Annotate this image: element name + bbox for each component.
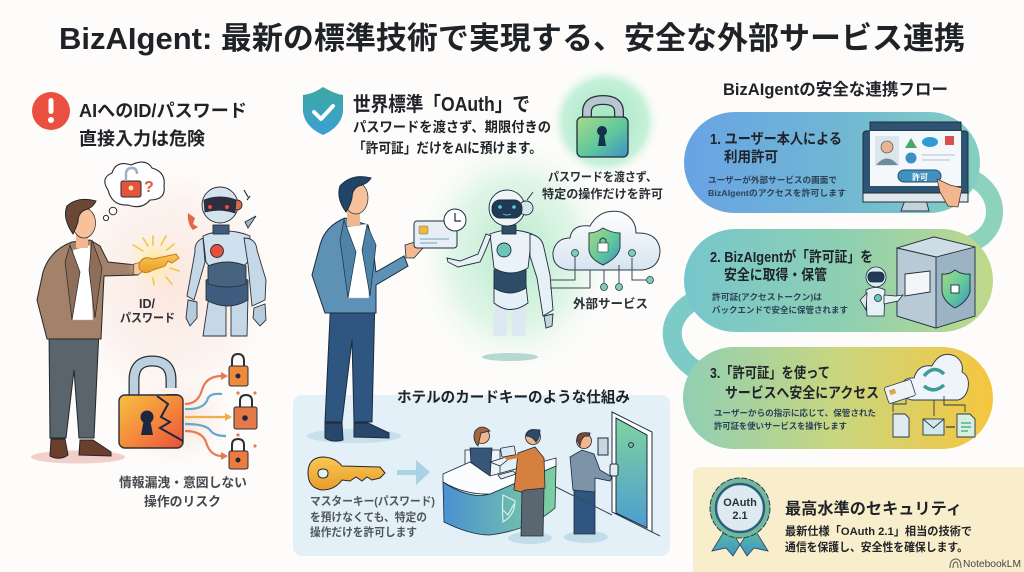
step 3 description: 許可証を使いサービスを操作します: [714, 420, 847, 431]
description: security: [785, 524, 972, 554]
step 2 title: 2. BizAIgentが「許可証」を: [710, 248, 873, 266]
icon: green document: [957, 414, 975, 437]
arrow: key to hotel: [397, 460, 430, 485]
icon: green padlock: [549, 66, 661, 178]
door: [598, 412, 652, 532]
icon: check shield: [303, 87, 343, 135]
icon: cloud with sync: [893, 354, 968, 416]
step 1: [684, 112, 980, 213]
reception desk: [443, 458, 556, 535]
step 1 description: ユーザーが外部サービスの画面で: [708, 174, 837, 185]
NotebookLM mark: NotebookLM: [963, 559, 1021, 570]
thought bubble with broken lock: [103, 162, 164, 221]
heading: OAuth: [353, 93, 551, 156]
icon: safe with shield: [897, 237, 975, 328]
heading: flow: BizAIgentの安全な連携フロー: [723, 79, 948, 99]
badge: OAuth 2.1: OAuth: [723, 497, 757, 509]
robot: friendly: [447, 190, 553, 361]
step 2 title: [710, 248, 873, 284]
icon: master key: [308, 457, 385, 490]
hotel reception scene: [443, 412, 660, 544]
badge: OAuth 2.1: [710, 478, 770, 556]
connector: step 1 to 2: [966, 176, 994, 245]
heading: OAuth: パスワードを渡さず、期限付きの: [353, 119, 551, 135]
heading: hotel: ホテルのカードキーのような仕組み: [397, 389, 630, 406]
step 2 title: 安全に取得・保管: [724, 266, 827, 284]
label: ID/password: パスワード: [120, 311, 175, 325]
step 2 description: [712, 291, 848, 315]
person with brown jacket: [31, 199, 144, 464]
icon: envelope: [923, 419, 944, 435]
customer in orange: [500, 430, 552, 544]
icon: monitor with permission screen: 許可: [912, 172, 928, 182]
step 1 title: 1. ユーザー本人による: [710, 131, 842, 148]
heading: OAuth: 「許可証」だけをAIに預けます。: [353, 140, 542, 156]
step 3 title: 3.「許可証」を使って: [710, 364, 830, 382]
background glow: green: [410, 130, 620, 380]
step 1 title: [710, 131, 842, 166]
text: risk caption: 操作のリスク: [144, 494, 221, 509]
step 1 description: [708, 174, 846, 198]
panel: safe integration flow: [672, 79, 994, 449]
caption: lock: 特定の操作だけを許可: [542, 186, 663, 201]
step 2 description: バックエンドで安全に保管されます: [712, 304, 848, 315]
panel: danger of direct password entry: [31, 92, 290, 509]
step 1 title: 利用許可: [724, 149, 778, 166]
step 2 description: 許可証(アクセストークン)は: [712, 291, 822, 302]
guest at door: [564, 433, 612, 543]
text: master key: [310, 495, 435, 539]
text: master key: 操作だけを許可します: [310, 525, 417, 539]
heading: danger: 直接入力は危険: [79, 129, 205, 149]
step 3 description: [714, 407, 876, 431]
small lock 2: [234, 395, 257, 429]
text: master key: マスターキー(パスワード): [310, 495, 435, 508]
badge: OAuth 2.1: 2.1: [732, 510, 748, 522]
step 3: [683, 347, 993, 449]
heading: danger: [79, 101, 247, 149]
connector: step 2 to 3: [672, 296, 712, 378]
panel background: hotel: [293, 395, 670, 556]
icon: card: [884, 379, 916, 404]
broken lock with leaking data: [105, 354, 257, 475]
step 3 description: ユーザーからの指示に応じて、保管された: [714, 407, 876, 418]
step 1 description: BizAIgentのアクセスを許可します: [708, 187, 846, 198]
text: risk caption: [119, 475, 247, 509]
step 3 title: [710, 364, 879, 402]
thought bubble with broken lock: ?: [144, 179, 154, 196]
external service cloud: [550, 211, 660, 290]
label: ID/password: [120, 297, 175, 325]
description: security: 最新仕様「OAuth 2.1」相当の技術で: [785, 524, 972, 538]
description: security: 通信を保護し、安全性を確保します。: [785, 540, 968, 554]
icon: permit card with clock: [414, 209, 466, 248]
icon: document: [893, 414, 909, 437]
icon: small robot: [860, 267, 903, 316]
caption: lock: パスワードを渡さず、: [548, 169, 657, 184]
caption: lock: [542, 169, 663, 201]
icon: glowing key: [127, 234, 183, 290]
label: external services: 外部サービス: [573, 296, 648, 311]
panel: hotel card key analogy: [293, 389, 670, 556]
panel: top-level security: [693, 467, 1024, 572]
step 2: [684, 229, 993, 332]
heading: security: 最高水準のセキュリティ: [785, 499, 962, 518]
small lock 1: [229, 354, 248, 386]
label: ID/password: ID/: [139, 297, 156, 311]
heading: danger: AIへのID/パスワード: [79, 101, 247, 121]
step 3 title: サービスへ安全にアクセス: [725, 384, 879, 402]
icon: cloud shield: [589, 228, 620, 265]
robot: confused: [186, 187, 266, 336]
heading: OAuth: 世界標準「OAuth」で: [353, 93, 530, 116]
text: risk caption: 情報漏洩・意図しない: [119, 475, 247, 490]
panel: OAuth explanation: [303, 66, 663, 443]
small lock 3: [229, 439, 248, 469]
icon: arrow to document: [946, 426, 955, 428]
title: BizAIgent: 最新の標準技術で実現する、安全な外部サービス連携: [59, 21, 965, 56]
icon: monitor with permission screen: [863, 122, 968, 211]
background glow: danger: [50, 150, 290, 420]
person with blue jacket: [307, 177, 423, 443]
panel background: security: [693, 467, 1024, 572]
receptionist: [465, 427, 515, 480]
text: master key: を預けなくても、特定の: [310, 510, 427, 524]
icon: warning: [32, 92, 70, 130]
